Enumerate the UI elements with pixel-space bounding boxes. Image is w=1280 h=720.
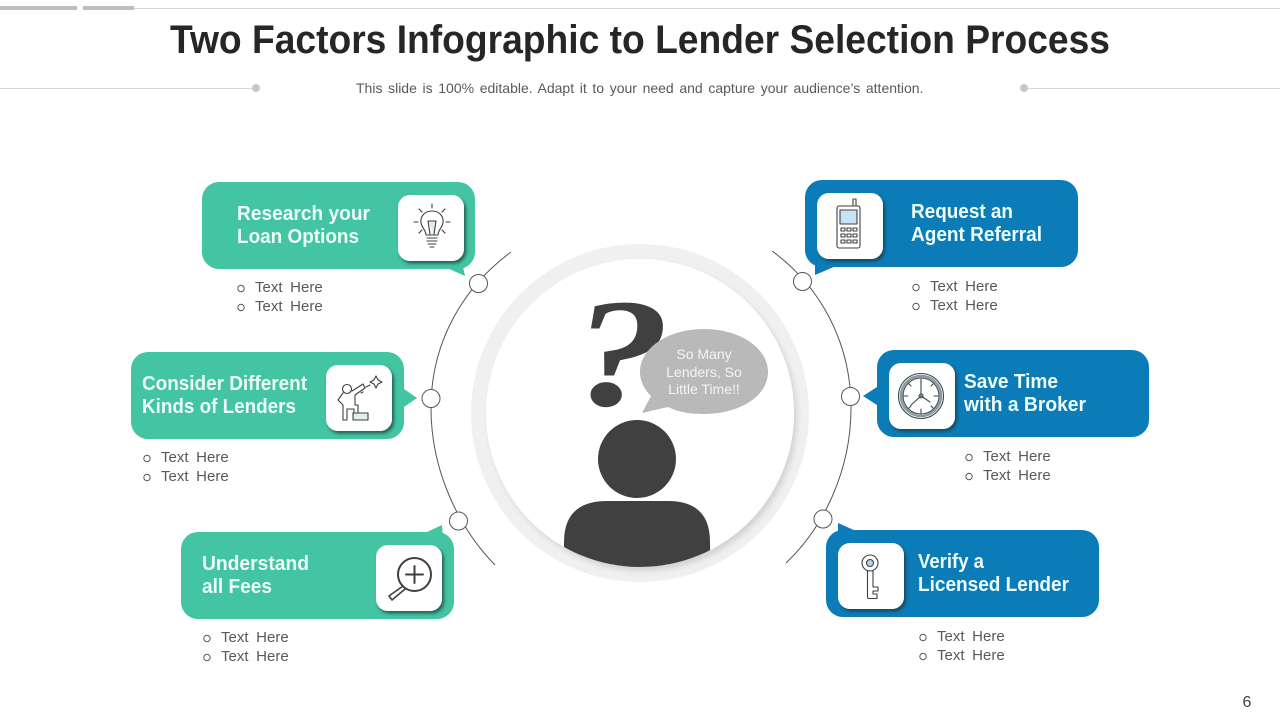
list: verify: Text Here [937, 628, 1005, 645]
icon: light bulb [414, 204, 450, 247]
icon: magnifier [389, 558, 431, 600]
list: research: Text Here [255, 279, 323, 296]
person icon [564, 420, 710, 570]
list: fees: Text Here [221, 648, 289, 665]
list: fees: Text Here [221, 629, 289, 646]
heading: fees [202, 553, 309, 598]
speech bubble [640, 329, 768, 414]
icon: key [862, 555, 878, 598]
panel: research your loan options [202, 182, 475, 276]
list: consider: Text Here [161, 449, 229, 466]
heading: request: Agent Referral [911, 224, 1042, 246]
speech bubble: So Many [676, 346, 732, 362]
panel: save time with a broker [863, 350, 1149, 437]
arc nodes [422, 272, 860, 530]
speech bubble: Lenders, So [666, 364, 742, 380]
list: request: Text Here [930, 297, 998, 314]
list: research: Text Here [255, 298, 323, 315]
heading: consider [142, 373, 307, 418]
heading: save time: Save Time [964, 371, 1058, 393]
panel: understand all fees [181, 525, 454, 619]
list: verify: Text Here [937, 647, 1005, 664]
list: research [238, 279, 323, 315]
subtitle: This slide is 100% editable. Adapt it to your need and capture your audience’s attention. [356, 80, 924, 96]
list: fees [204, 629, 289, 665]
central circle [471, 244, 809, 582]
heading: request [911, 201, 1042, 246]
icon: clock [898, 374, 944, 418]
heading: request: Request an [911, 201, 1013, 223]
list: verify [920, 628, 1005, 664]
list: save time [966, 448, 1051, 484]
list: request: Text Here [930, 278, 998, 295]
speech bubble: Little Time!! [668, 381, 740, 397]
list: save time: Text Here [983, 448, 1051, 465]
heading: research [237, 203, 370, 248]
heading: fees: all Fees [202, 576, 272, 598]
panel: request an agent referral [805, 180, 1078, 275]
heading: save time [963, 371, 1086, 416]
heading: verify: Licensed Lender [918, 574, 1069, 596]
panel: consider different kinds of lenders [131, 352, 417, 439]
heading: research: Loan Options [237, 226, 359, 248]
page number: 6 [1243, 694, 1252, 711]
header decoration bars [0, 6, 1280, 10]
panel: verify a licensed lender [826, 523, 1099, 617]
subtitle rule right [1020, 84, 1280, 92]
heading: save time: with a Broker [963, 394, 1086, 416]
heading: consider: Consider Different [142, 373, 307, 395]
subtitle rule left [0, 84, 260, 92]
list: consider: Text Here [161, 468, 229, 485]
list: consider [144, 449, 229, 485]
heading: research: Research your [237, 203, 370, 225]
question mark: ? [573, 267, 670, 439]
heading: verify: Verify a [918, 551, 985, 573]
title: Two Factors Infographic to Lender Selection Process [170, 18, 1110, 62]
heading: consider: Kinds of Lenders [142, 396, 296, 418]
icon: person reaching for star [338, 376, 382, 420]
heading: verify [918, 551, 1069, 596]
heading: fees: Understand [202, 553, 309, 575]
right arc [772, 251, 851, 563]
left arc [431, 252, 511, 565]
icon: mobile phone [837, 199, 860, 248]
list: request [913, 278, 998, 314]
list: save time: Text Here [983, 467, 1051, 484]
